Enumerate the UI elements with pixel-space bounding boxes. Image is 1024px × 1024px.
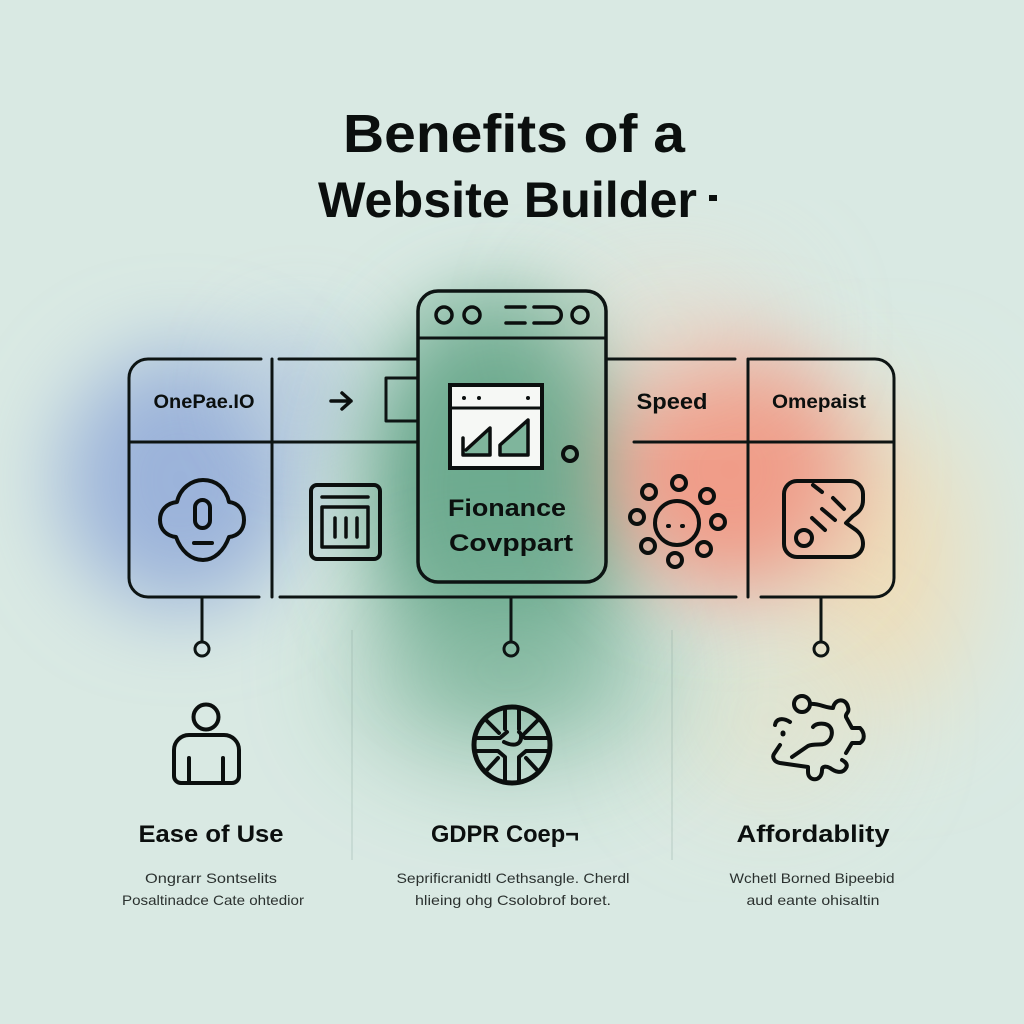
icon: small circle bbox=[563, 447, 577, 461]
arrow: tab arrow bbox=[331, 393, 351, 409]
heading: GDPR Coep: GDPR Coep¬ bbox=[431, 821, 579, 848]
tab label: Speed: Speed bbox=[636, 389, 708, 414]
text block: right description bbox=[730, 870, 894, 908]
icon: tab square bbox=[386, 378, 417, 421]
text block: center description: Seprificranidtl Cethsangle. Cherdl bbox=[396, 870, 630, 886]
icon: sun gear bbox=[630, 476, 725, 567]
text block: center description: hlieing ohg Csolobrof boret. bbox=[415, 892, 611, 908]
text block: right description: Wchetl Borned Bipeebid bbox=[730, 870, 894, 886]
icon: browser controls bbox=[436, 307, 588, 323]
title: Website Builder bbox=[318, 172, 697, 228]
tab label: Omepaist: Omepaist bbox=[772, 392, 867, 413]
text block: left description bbox=[122, 870, 304, 908]
panel: horizontal website builder frame bbox=[129, 359, 894, 597]
connector: right bbox=[814, 598, 828, 656]
text block: center description bbox=[396, 870, 630, 908]
tab label: OnePae.IO: OnePae.IO bbox=[154, 392, 254, 413]
panel: central browser card: Covppart bbox=[449, 530, 573, 557]
icon: tag badge bbox=[784, 481, 863, 557]
text block: left description: Ongrarr Sontselits bbox=[145, 870, 277, 886]
connector: left bbox=[195, 598, 209, 656]
icon: globe shield bbox=[474, 707, 550, 783]
text block: left description: Posaltinadce Cate ohtedior bbox=[122, 892, 304, 908]
title: Benefits of a bbox=[343, 104, 686, 164]
icon: layout window bbox=[311, 485, 380, 559]
icon: headset face bbox=[160, 480, 244, 560]
card label: Fionance bbox=[448, 495, 566, 522]
connector: center bbox=[504, 598, 518, 656]
icon: window chart bbox=[450, 385, 542, 468]
icon: gear puzzle bbox=[773, 696, 864, 779]
heading: Affordablity: Affordablity bbox=[736, 821, 890, 848]
title bbox=[318, 104, 717, 228]
panel: central browser card bbox=[418, 291, 606, 582]
heading: Ease of Use: Ease of Use bbox=[138, 821, 284, 848]
icon: person bbox=[174, 704, 239, 783]
text block: right description: aud eante ohisaltin bbox=[746, 892, 880, 908]
